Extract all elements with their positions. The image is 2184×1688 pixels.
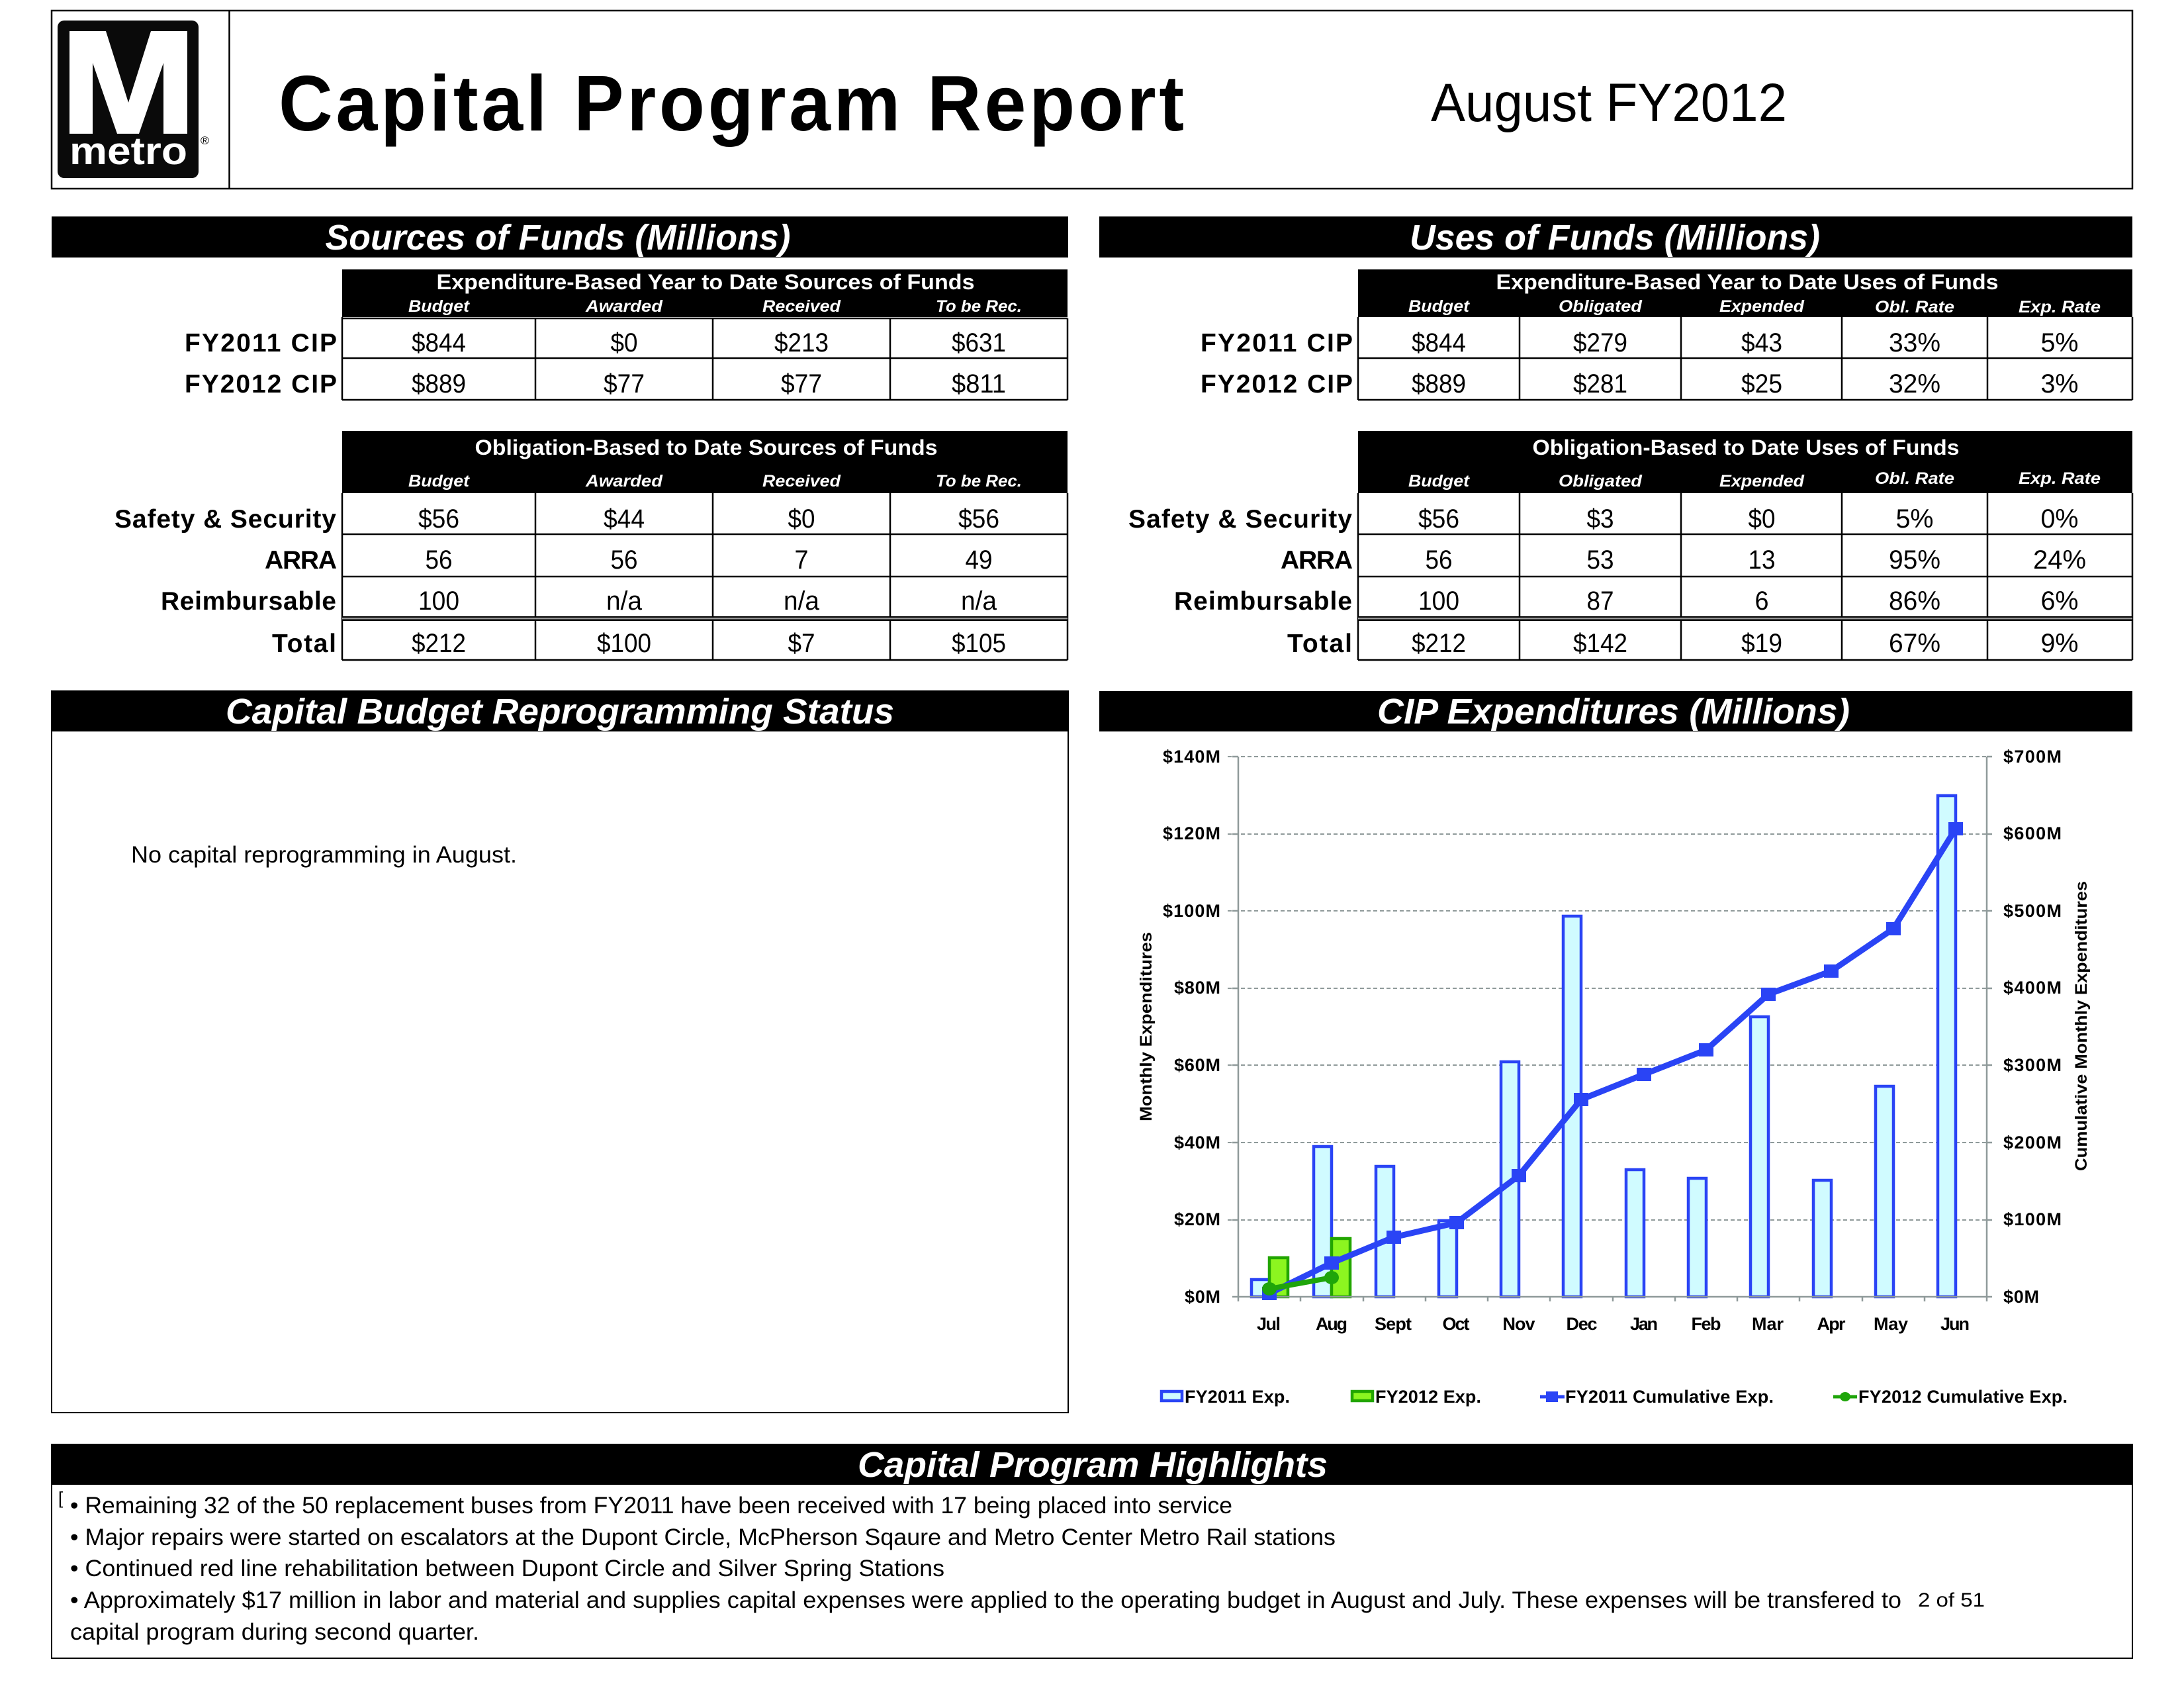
table: obligation-based sources: ARRA <box>265 546 337 575</box>
table: obligation-based uses: Safety & Security <box>1128 505 1352 534</box>
table: obligation-based uses: 9% <box>2041 629 2078 658</box>
legend: FY2012 Exp. <box>1375 1387 1481 1407</box>
table: obligation-based uses: Obl. Rate <box>1875 469 1954 488</box>
table: expenditure-based uses: 3% <box>2041 369 2078 399</box>
icon: metro logo: metro <box>69 130 187 173</box>
table: obligation-based uses: $3 <box>1587 504 1614 534</box>
table: expenditure-based uses: $279 <box>1573 328 1627 357</box>
legend <box>1161 1387 2068 1407</box>
heading: capital program highlights: Capital Program Highlights <box>858 1445 1328 1485</box>
left axis labels: $60M <box>1174 1055 1220 1075</box>
left axis labels <box>1163 747 1220 1307</box>
table: expenditure-based uses: Expended <box>1719 297 1805 316</box>
text: highlights list: capital program during second quarter. <box>70 1619 479 1645</box>
table: expenditure-based uses: FY2012 CIP <box>1201 370 1353 399</box>
table: obligation-based uses: 0% <box>2041 504 2078 534</box>
title: Capital Program Report <box>279 59 1184 148</box>
table: obligation-based uses: Obligation-Based to Date Uses of Funds <box>1533 436 1959 459</box>
right axis labels: $400M <box>2003 978 2062 998</box>
left axis labels: $80M <box>1174 978 1220 998</box>
chart: monthly and cumulative expenditures <box>1137 747 2091 1407</box>
table: obligation-based sources: 49 <box>965 545 993 575</box>
icon: metro logo: ® <box>201 134 209 147</box>
table: expenditure-based uses: Expenditure-Based Year to Date Uses of Funds <box>1496 270 1999 294</box>
left axis labels: $100M <box>1163 901 1220 921</box>
table: obligation-based uses: 86% <box>1889 586 1940 616</box>
month labels <box>1257 1314 1970 1334</box>
heading: uses of funds: Uses of Funds (Millions) <box>1410 218 1820 258</box>
month labels: Sept <box>1375 1314 1412 1334</box>
table: obligation-based sources: $7 <box>788 629 815 658</box>
month labels: Jul <box>1257 1314 1281 1334</box>
text: highlights list: • Remaining 32 of the 50 replacement buses from FY2011 have been received with 17 being placed into service <box>70 1493 1232 1519</box>
table: obligation-based uses: 87 <box>1587 586 1614 616</box>
table: expenditure-based sources: $77 <box>604 369 645 399</box>
table: obligation-based uses: 100 <box>1418 586 1459 616</box>
table: obligation-based sources: Received <box>762 472 841 491</box>
table: expenditure-based sources: Received <box>762 297 841 316</box>
left axis labels: $140M <box>1163 747 1220 767</box>
right axis labels: $600M <box>2003 823 2062 843</box>
table: expenditure-based sources: Budget <box>408 297 471 316</box>
heading: capital program highlights <box>52 1444 2132 1485</box>
table: obligation-based uses: $212 <box>1412 629 1466 658</box>
left axis labels: $40M <box>1174 1133 1220 1152</box>
heading: reprogramming status <box>52 691 1068 731</box>
table: obligation-based sources: 56 <box>425 545 453 575</box>
table: expenditure-based uses: Exp. Rate <box>2019 298 2101 316</box>
table: expenditure-based sources: $213 <box>774 328 829 357</box>
legend: FY2011 Exp. <box>1185 1387 1290 1407</box>
table: expenditure-based uses: Obl. Rate <box>1875 298 1954 316</box>
table: obligation-based sources: n/a <box>606 586 643 616</box>
table: expenditure-based sources: To be Rec. <box>936 297 1022 316</box>
heading: uses of funds <box>1099 216 2132 258</box>
table: expenditure-based sources: $0 <box>610 328 638 357</box>
table: obligation-based sources: Obligation-Based to Date Sources of Funds <box>475 436 937 459</box>
table: obligation-based uses: ARRA <box>1281 546 1353 575</box>
panel: capital program highlights <box>52 1444 2132 1658</box>
table: expenditure-based uses: FY2011 CIP <box>1201 329 1353 357</box>
table: obligation-based uses: Exp. Rate <box>2019 469 2101 488</box>
text: highlights list <box>70 1493 1901 1645</box>
left axis labels: $0M <box>1185 1287 1220 1307</box>
panel: sources of funds <box>52 216 1068 660</box>
heading: reprogramming status: Capital Budget Reprogramming Status <box>226 692 894 731</box>
table: obligation-based uses: 5% <box>1895 504 1934 534</box>
table: obligation-based uses: 13 <box>1749 545 1775 575</box>
right axis labels: $500M <box>2003 901 2062 921</box>
text: highlights list: • Continued red line rehabilitation between Dupont Circle and Silver Spring Stations <box>70 1556 944 1581</box>
table: expenditure-based sources: Awarded <box>585 297 663 316</box>
legend: FY2011 Cumulative Exp. <box>1565 1387 1774 1407</box>
month labels: Jun <box>1940 1314 1970 1334</box>
table: obligation-based uses: $19 <box>1741 629 1782 658</box>
table: obligation-based sources: $56 <box>418 504 459 534</box>
table: expenditure-based uses: $844 <box>1412 328 1466 357</box>
page number: 2 of 51 <box>1918 1589 1985 1611</box>
table: expenditure-based uses: 32% <box>1889 369 1940 399</box>
table: expenditure-based uses <box>1201 269 2132 400</box>
line: FY2012 cumulative expenditures <box>1262 1271 1339 1295</box>
right axis labels: $200M <box>2003 1133 2062 1152</box>
panel: CIP expenditures <box>1099 691 2132 1407</box>
table: obligation-based sources: Total <box>272 630 336 658</box>
table: obligation-based sources: Safety & Security <box>114 505 336 534</box>
heading: CIP expenditures <box>1099 691 2132 731</box>
right axis labels: $700M <box>2003 747 2062 767</box>
panel: uses of funds <box>1099 216 2132 660</box>
table: expenditure-based uses: Obligated <box>1559 297 1643 316</box>
table: obligation-based sources: $100 <box>597 629 651 658</box>
panel: capital budget reprogramming status <box>52 691 1068 1413</box>
table: obligation-based sources: n/a <box>961 586 997 616</box>
table: expenditure-based uses: $43 <box>1741 328 1782 357</box>
right axis labels: $100M <box>2003 1209 2062 1229</box>
table: obligation-based sources: $44 <box>604 504 645 534</box>
table: obligation-based sources: n/a <box>784 586 820 616</box>
table: obligation-based sources: Awarded <box>585 472 663 491</box>
table: obligation-based uses: 56 <box>1426 545 1452 575</box>
bars: FY2012 monthly expenditures <box>1269 1239 1350 1297</box>
heading: CIP expenditures: CIP Expenditures (Millions) <box>1377 692 1850 731</box>
table: obligation-based sources: $105 <box>952 629 1006 658</box>
month labels: Apr <box>1817 1314 1846 1334</box>
table: obligation-based uses: 6% <box>2041 586 2078 616</box>
table: obligation-based uses: Budget <box>1408 472 1471 491</box>
report date: August FY2012 <box>1431 73 1787 133</box>
table: obligation-based sources: $0 <box>788 504 815 534</box>
table: obligation-based sources: 100 <box>418 586 459 616</box>
table: obligation-based uses: 6 <box>1755 586 1768 616</box>
heading: sources of funds: Sources of Funds (Millions) <box>326 218 790 258</box>
table: expenditure-based sources: $631 <box>952 328 1006 357</box>
text: highlights list: • Approximately $17 million in labor and material and supplies capital expenses were applied to the operating budget in August and July. These expenses will be transfered to <box>70 1587 1901 1613</box>
right axis title: Cumulative Monthly Expenditures <box>2072 881 2091 1171</box>
table: obligation-based sources: 7 <box>794 545 809 575</box>
table: obligation-based uses: 95% <box>1889 545 1940 575</box>
month labels: Nov <box>1502 1314 1535 1334</box>
legend: FY2012 Cumulative Exp. <box>1858 1387 2068 1407</box>
table: expenditure-based sources: $844 <box>412 328 466 357</box>
table: obligation-based uses: $142 <box>1573 629 1627 658</box>
table: expenditure-based uses: Budget <box>1408 297 1471 316</box>
table: obligation-based uses <box>1128 431 2132 660</box>
table: expenditure-based sources: FY2011 CIP <box>185 329 337 357</box>
table: expenditure-based uses: 5% <box>2041 328 2078 357</box>
month labels: Aug <box>1316 1314 1347 1334</box>
table: obligation-based sources: $212 <box>412 629 466 658</box>
table: obligation-based sources: $56 <box>958 504 999 534</box>
month labels: Feb <box>1692 1314 1721 1334</box>
table: obligation-based uses: 53 <box>1587 545 1614 575</box>
text: highlights list: • Major repairs were started on escalators at the Dupont Circle, McPherson Sqaure and Metro Center Metro Rail stations <box>70 1524 1336 1550</box>
header panel <box>52 11 2132 189</box>
table: obligation-based sources: To be Rec. <box>936 472 1022 491</box>
table: expenditure-based sources: $889 <box>412 369 466 399</box>
table: expenditure-based sources: $811 <box>952 369 1006 399</box>
table: expenditure-based uses: 33% <box>1889 328 1940 357</box>
table: obligation-based uses: 67% <box>1889 629 1940 658</box>
table: obligation-based sources <box>114 431 1068 660</box>
line: FY2011 cumulative expenditures <box>1262 822 1963 1300</box>
table: obligation-based sources: 56 <box>610 545 638 575</box>
table: obligation-based uses: $0 <box>1749 504 1775 534</box>
left axis labels: $20M <box>1174 1209 1220 1229</box>
table: expenditure-based sources <box>185 269 1068 400</box>
right axis labels: $0M <box>2003 1287 2039 1307</box>
bars: FY2011 monthly expenditures <box>1251 796 1956 1297</box>
table: obligation-based uses: Expended <box>1719 472 1805 491</box>
table: expenditure-based uses: $281 <box>1573 369 1627 399</box>
table: obligation-based sources: Budget <box>408 472 471 491</box>
heading: sources of funds <box>52 216 1068 258</box>
month labels: May <box>1874 1314 1908 1334</box>
table: obligation-based uses: Total <box>1287 630 1352 658</box>
table: obligation-based uses: $56 <box>1418 504 1459 534</box>
month labels: Dec <box>1566 1314 1598 1334</box>
table: obligation-based uses: Obligated <box>1559 472 1643 491</box>
table: obligation-based uses: Reimbursable <box>1174 587 1352 616</box>
month labels: Mar <box>1752 1314 1784 1334</box>
table: expenditure-based uses: $889 <box>1412 369 1466 399</box>
right axis labels <box>2003 747 2062 1307</box>
table: expenditure-based sources: FY2012 CIP <box>185 370 337 399</box>
left axis title: Monthly Expenditures <box>1137 932 1156 1121</box>
month labels: Oct <box>1443 1314 1469 1334</box>
left axis labels: $120M <box>1163 823 1220 843</box>
table: obligation-based sources: Reimbursable <box>161 587 336 616</box>
text: stray bracket: [ <box>58 1488 64 1508</box>
right axis labels: $300M <box>2003 1055 2062 1075</box>
table: expenditure-based uses: $25 <box>1741 369 1782 399</box>
text: reprogramming note: No capital reprogramming in August. <box>131 842 517 868</box>
table: obligation-based uses: 24% <box>2033 545 2086 575</box>
month labels: Jan <box>1630 1314 1658 1334</box>
table: expenditure-based sources: Expenditure-Based Year to Date Sources of Funds <box>437 270 974 294</box>
table: expenditure-based sources: $77 <box>781 369 822 399</box>
icon: metro logo <box>58 21 209 178</box>
